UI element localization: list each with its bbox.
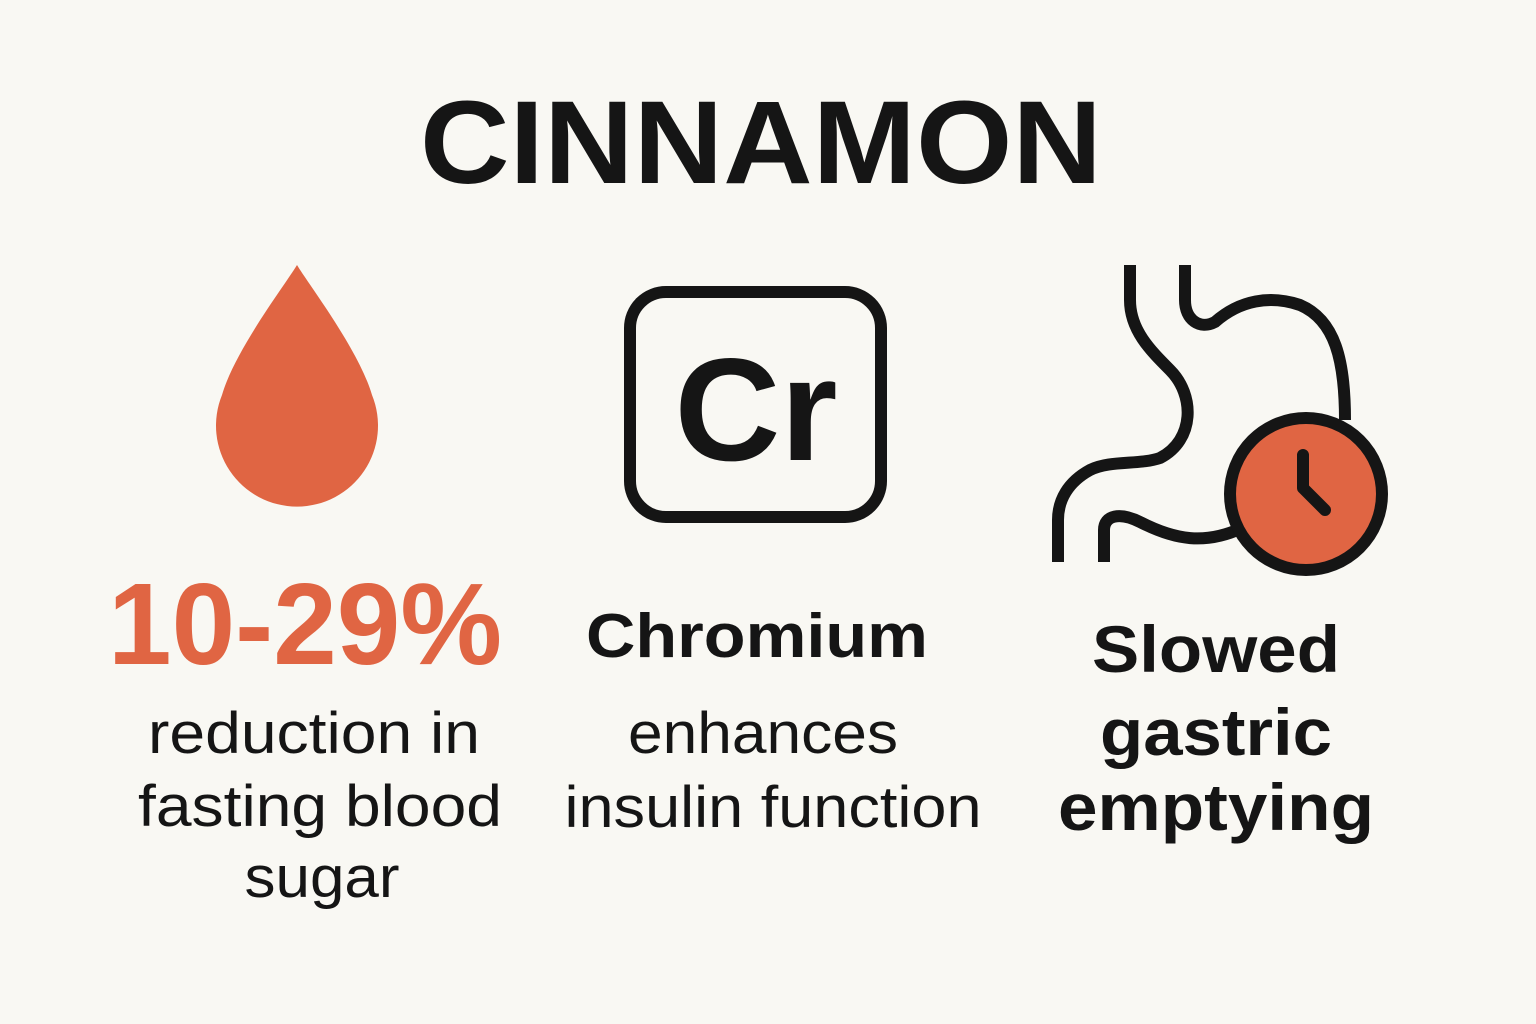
text: Slowed gastric emptying: gastric: [1100, 695, 1332, 769]
stat: 10-29%: 10-29%: [108, 559, 502, 689]
text: reduction in fasting blood sugar: fasting blood: [138, 774, 502, 839]
icon: Cr element box: [630, 292, 881, 517]
icon: blood drop: [216, 265, 378, 507]
text: enhances insulin function: [564, 701, 982, 840]
text: enhances insulin function: insulin function: [564, 775, 982, 840]
heading: Chromium: Chromium: [586, 602, 928, 671]
icon: Cr element box: Cr: [674, 328, 838, 491]
text: reduction in fasting blood sugar: sugar: [244, 845, 400, 910]
text: Slowed gastric emptying: Slowed: [1092, 612, 1340, 686]
text: Slowed gastric emptying: [1058, 612, 1374, 844]
icon: stomach with clock: [1058, 265, 1382, 570]
title: CINNAMON: [420, 77, 1102, 209]
text: reduction in fasting blood sugar: [138, 701, 502, 910]
text: reduction in fasting blood sugar: reduction in: [148, 701, 480, 766]
text: enhances insulin function: enhances: [628, 701, 898, 766]
text: Slowed gastric emptying: emptying: [1058, 770, 1374, 844]
